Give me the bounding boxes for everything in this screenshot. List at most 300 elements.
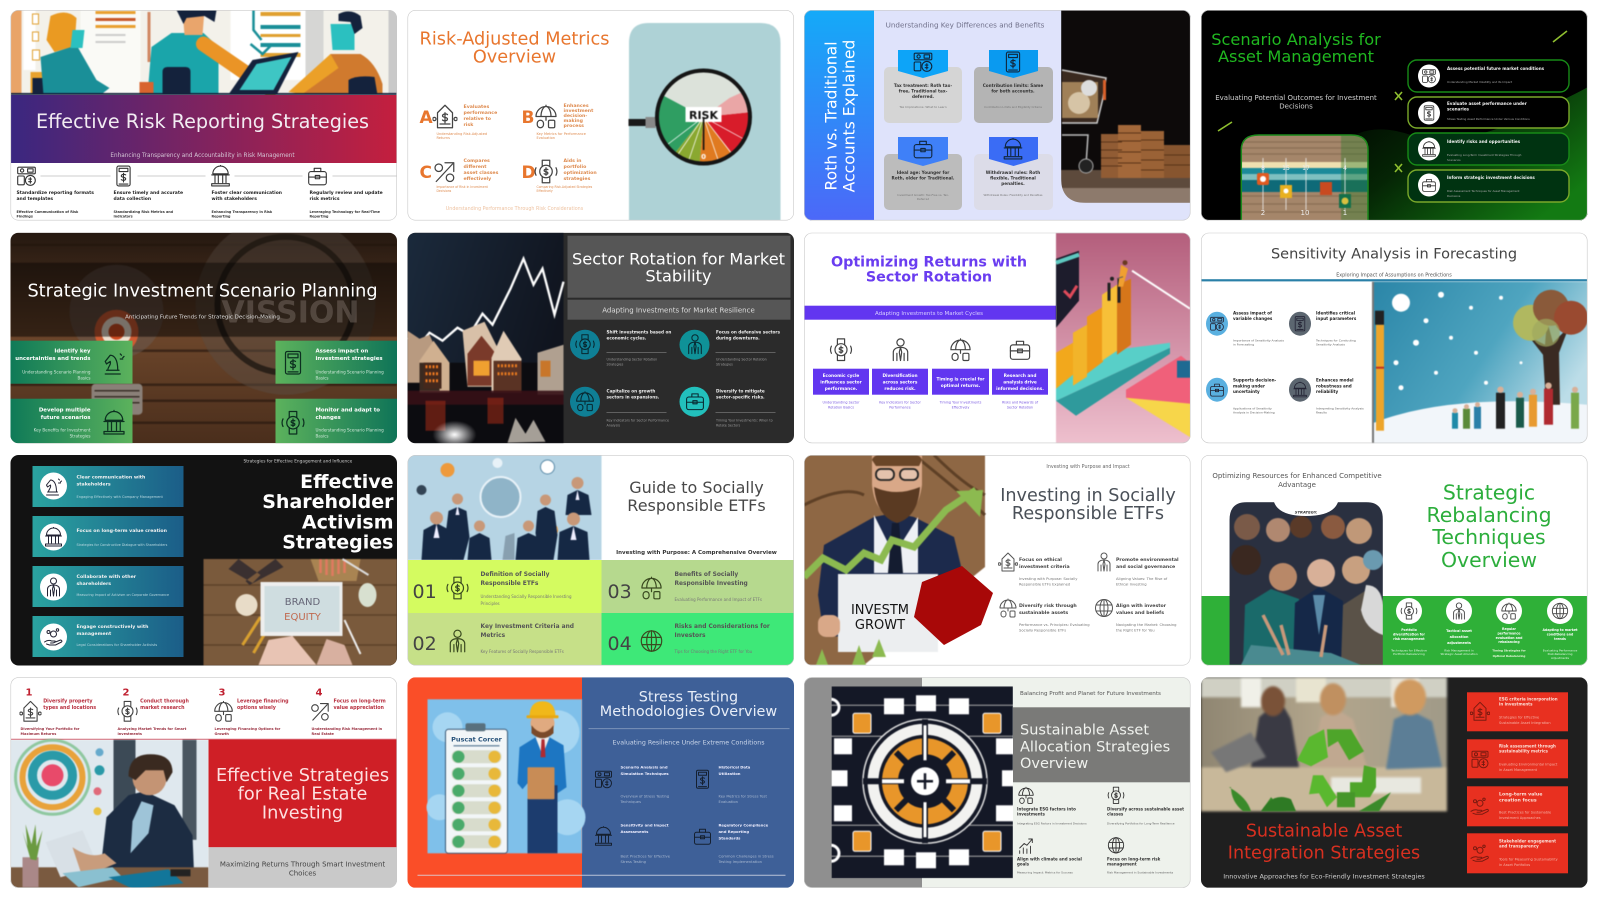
photo: recycling symbol over a blurred meeting (1201, 677, 1447, 811)
column: portfolio diversification: Portfolio (1401, 628, 1418, 632)
item: align with climate: goals (1017, 861, 1030, 866)
title: Optimizing Returns with (831, 255, 1027, 271)
item: historical data: Utilization (718, 771, 741, 776)
subtitle block (208, 847, 397, 888)
subtitle band: Adapting Investments for Market Resilience (602, 307, 755, 315)
metric A: risk (464, 122, 474, 128)
item: inform strategic decisions: Decisions (1447, 194, 1461, 198)
title: Stress Testing (639, 689, 738, 705)
card: research: Risks and Rewards of (1002, 401, 1039, 405)
item: clear communication: stakeholders (76, 482, 111, 488)
card: research: analysis drive (1003, 380, 1037, 386)
illustration: engineer with a checklist (426, 699, 586, 853)
step 2 (114, 166, 183, 219)
item: integrate ESG (1017, 787, 1087, 825)
column: regular evaluation: rebalancing (1498, 640, 1520, 644)
metric D: Aids in (564, 158, 581, 164)
item: clear communication (32, 466, 184, 507)
column: portfolio diversification: risk management (1393, 637, 1425, 641)
panel: Strategic Rebalancing Techniques Overview slide (1201, 455, 1588, 666)
metric C: effectively (464, 176, 491, 182)
title band: Sustainable Asset (1020, 722, 1149, 738)
subtitle: Evaluating Resilience Under Extreme Conditions (613, 739, 764, 746)
column: portfolio diversification (1390, 598, 1427, 656)
step 4 (309, 168, 383, 219)
card: withdrawal rules: Withdrawal Rules: Flexibility and Penalties (983, 193, 1043, 197)
strategy 2: 2 (122, 687, 130, 698)
card: diversification: Key Indicators for Sector (879, 401, 921, 405)
metric B: process (564, 123, 584, 129)
item: diversify (680, 387, 776, 428)
title: Strategic Investment Scenario Planning (27, 282, 378, 302)
card: economic cycle: Rotation Basics (828, 406, 854, 410)
item: sensitivity assessments: Sensitivity and Impact (620, 822, 669, 827)
side band with rotated title: Accounts Explained (840, 40, 858, 192)
item: enhances model robustness: Results (1316, 410, 1327, 414)
item: long-term value: Focus on long-term value creation (76, 528, 167, 534)
item: inform strategic decisions (1408, 170, 1569, 202)
photo: business team with network icons (408, 455, 602, 560)
column: regular evaluation: Timing Strategies for (1492, 648, 1526, 652)
title: Techniques (1431, 525, 1546, 549)
item: assess impact of variable changes: in Forecasting (1233, 342, 1254, 346)
header text: Understanding Key Differences and Benefits (886, 20, 1045, 30)
step 3 (212, 165, 282, 219)
title: Sustainable Asset (1246, 821, 1402, 841)
item: ESG criteria: Sustainable Asset Integration (1499, 721, 1551, 725)
card: economic cycle: Understanding Sector (823, 401, 860, 405)
column: adapting to market: trends (1554, 637, 1566, 641)
column: tactical allocation: Tactical asset (1446, 629, 1472, 633)
item: scenario analysis: Simulation Techniques (620, 771, 669, 776)
item: ESG criteria: in investments (1499, 701, 1533, 706)
metric D: portfolio (564, 164, 587, 170)
item: align with climate: Align with climate and social (1017, 856, 1083, 861)
title: Strategic (1443, 480, 1535, 504)
title: Asset Management (1218, 47, 1374, 66)
box: develop multiple future scenarios: Develop multiple (39, 408, 91, 414)
strategy 2: market research (140, 705, 185, 711)
title: Responsible ETFs (627, 496, 766, 515)
subtitle: Exploring Impact of Assumptions on Predictions (1336, 273, 1452, 279)
box: identify key uncertainties (10, 341, 132, 384)
item: collaborate: shareholders (76, 581, 111, 587)
item: risk assessment (1467, 739, 1568, 778)
item: collaborate: Collaborate with other (76, 574, 137, 580)
strategy 1: Diversifying Your Portfolio for (20, 727, 80, 731)
item: stakeholder engagement: in Asset Portfolios (1499, 863, 1530, 867)
strategy 4: 4 (316, 687, 322, 698)
block 02 (408, 613, 602, 666)
item: defensive sectors: Understanding Sector Rotation (716, 358, 767, 362)
subtitle: Anticipating Future Trends for Strategic Decision-Making (125, 315, 280, 321)
box: identify key uncertainties: Basics (78, 376, 90, 381)
card: research: informed decisions. (996, 386, 1044, 392)
strategy 2: Analyzing Market Trends for Smart (118, 727, 187, 731)
block 04: Risks and Considerations for (674, 624, 770, 630)
column: adapting to market: Post-Rebalancing (1548, 652, 1573, 656)
item: integrate ESG: Integrate ESG factors into (1017, 806, 1076, 811)
item: evaluate asset performance: scenarios (1447, 106, 1470, 112)
card: research (992, 341, 1048, 410)
subtitle band: Adapting Investments to Market Cycles (875, 311, 983, 317)
item: environmental governance: Ethical Investing (1116, 582, 1147, 586)
panel: Sustainable Asset Integration Strategies slide (1201, 677, 1588, 888)
item: long-term value: Long-term value (1499, 791, 1542, 797)
item: supports decision making: Applications of Sensitivity (1233, 407, 1272, 411)
step 4: risk metrics (310, 196, 340, 202)
panel: Optimizing Returns with Sector Rotation slide (804, 233, 1191, 443)
tablet wording: EQUITY (284, 612, 322, 623)
column: regular evaluation: evaluation and (1496, 636, 1523, 640)
column: tactical allocation (1440, 598, 1478, 656)
item: assess impact of variable changes: Assess impact of (1233, 311, 1272, 316)
photo: businessman with a laptop (10, 740, 208, 889)
item: regulatory compliance: Standards (718, 836, 741, 841)
card: ideal age (884, 137, 962, 210)
step 3: Foster clear communication (212, 190, 282, 196)
photo: team gathered around a table (1229, 502, 1383, 665)
metric B: Evaluation (536, 136, 555, 140)
box: assess impact on strategies: Assess impact on (316, 349, 368, 355)
subtitle band (568, 300, 790, 320)
strategy 3: Leverage financing (237, 698, 289, 704)
card: diversification: reduces risk. (884, 386, 916, 392)
header band with gradient (10, 95, 397, 163)
block 01: Responsible ETFs (480, 581, 539, 587)
card: tax treatment: Tax treatment: Roth tax- (894, 83, 952, 88)
subtitle: Investing with Purpose: A Comprehensive Overview (616, 550, 777, 556)
item: historical data (696, 764, 767, 804)
item: shift investments (570, 330, 671, 367)
column: regular evaluation: Regular (1502, 627, 1516, 631)
item: ethical criteria: Investing with Purpose: Socially (1019, 577, 1078, 581)
item: integrate ESG: Integrating ESG Factors in Investment Decisions (1017, 821, 1087, 825)
item: diversify: classes (1107, 811, 1124, 816)
item: long-term value: Investment Approaches (1499, 816, 1541, 820)
title: Investing in Socially (1000, 486, 1176, 506)
metric C: Importance of Risk in Investment (436, 185, 489, 189)
step 3: Enhancing Transparency in Risk (212, 210, 273, 214)
item: collaborate: Measuring Impact of Activism on Corporate Governance (76, 593, 169, 597)
item: supports decision making: uncertainty (1233, 389, 1260, 394)
illustration: isometric bars and handshake (1056, 233, 1191, 443)
item: engage constructively: Engage constructively with (76, 624, 148, 630)
column: adapting to market: Evaluating Performance (1543, 648, 1577, 652)
metric C: different (464, 164, 487, 170)
card: tax treatment: free, Traditional tax- (899, 88, 948, 94)
gauge zero: 0 (701, 153, 706, 161)
column: portfolio diversification: Techniques for Effective (1390, 648, 1427, 652)
box: monitor and adapt: changes (316, 415, 341, 421)
panel: Effective Risk Reporting Strategies slide (10, 10, 398, 220)
card: tax treatment (884, 50, 962, 123)
item: identify risks and opportunities (1408, 133, 1569, 165)
box: develop multiple future scenarios: Strategies (70, 434, 90, 439)
metric D: strategies (564, 176, 591, 182)
box: assess impact on strategies: Understanding Scenario Planning (316, 370, 384, 375)
block 01: Principles (480, 601, 500, 606)
strategy 1: Diversify property (43, 698, 93, 704)
item: align with climate: Measuring Impact: Metrics for Success (1017, 870, 1073, 874)
metric A: performance (464, 110, 497, 116)
item: diversify: sector-specific risks. (716, 395, 765, 400)
item: growth sectors: Analysis (606, 424, 620, 428)
item: environmental governance: Aligning Values: The Rise of (1116, 577, 1168, 581)
item: sensitivity assessments: Stress Testing (620, 860, 646, 864)
item: align with values: Navigating the Market: Choosing (1116, 623, 1177, 627)
block 03: 03 (608, 581, 632, 603)
tablet wording: BRAND (285, 597, 321, 608)
metric C: Decisions (436, 189, 452, 193)
metric D: D (522, 163, 536, 183)
item: diversify risk: Performance vs. Principles: Evaluating (1019, 623, 1090, 627)
panel: Risk-Adjusted Metrics Overview slide (408, 10, 794, 220)
item: stakeholder engagement: Stakeholder engagement (1499, 838, 1556, 843)
panel: Sector Rotation for Market Stability slide (408, 233, 794, 449)
item: risk assessment: Risk assessment through (1499, 743, 1556, 748)
title band (1013, 707, 1190, 782)
item: regulatory compliance: Testing Implementation (718, 860, 763, 864)
card: research: Research and (1004, 373, 1036, 379)
subtitle band (804, 306, 1056, 320)
subtitle: Innovative Approaches for Eco-Friendly Investment Strategies (1223, 872, 1425, 880)
card: tax treatment: deferred. (912, 94, 934, 99)
title: Effective Risk Reporting Strategies (36, 110, 369, 133)
metric D (522, 158, 597, 193)
item: shift investments: economic cycles. (606, 336, 647, 341)
strategy 4: Understanding Risk Management in (312, 727, 383, 731)
item: long-term value: creation focus (1499, 798, 1537, 804)
item: ethical criteria: Focus on ethical (1019, 557, 1062, 563)
background word: VISSION (221, 296, 360, 331)
item: diversify risk (1000, 599, 1090, 632)
item: historical data: Evaluation (718, 800, 739, 804)
item: engage constructively: management (76, 631, 112, 637)
panel: Sensitivity Analysis in Forecasting slide (1201, 233, 1588, 444)
block 02: Metrics (480, 633, 506, 639)
panel: Effective Shareholder Activism Strategies slide (10, 455, 398, 666)
caption: Balancing Profit and Planet for Future Investments (1020, 691, 1161, 697)
item: defensive sectors: Strategies (716, 363, 733, 367)
item: clear communication: Engaging Effectively with Company Management (76, 495, 163, 499)
panel: Effective Strategies for Real Estate Investing slide (10, 677, 397, 889)
item: regulatory compliance: Common Challenges in Stress (718, 854, 774, 858)
photo: businessman holding investment growth sign (804, 452, 985, 665)
card: economic cycle: performance. (825, 386, 858, 392)
axis numbers: 4 (1343, 165, 1347, 172)
item: ethical criteria: investment criteria (1019, 564, 1070, 570)
item: inform strategic decisions: Inform strategic investment decisions (1447, 175, 1535, 180)
image: scenario timeline (1241, 135, 1368, 221)
red title block: Effective Strategies (216, 766, 389, 786)
step 3: Reporting (212, 215, 231, 219)
card: contribution limits: Contribution Limits and Eligibility Criteria (984, 105, 1042, 109)
sign wording: GROWT (855, 618, 905, 633)
column: regular evaluation: performance (1498, 631, 1520, 635)
column: tactical allocation: Strategic Asset Allocation (1440, 652, 1478, 656)
block 03: Benefits of Socially (674, 572, 738, 578)
box: develop multiple future scenarios: future scenarios (41, 415, 90, 421)
subtitle: Decisions (1279, 102, 1313, 110)
item: historical data: Historical Data (718, 764, 751, 769)
block 01: Understanding Socially Responsible Investing (480, 594, 572, 599)
title: Guide to Socially (629, 478, 764, 497)
item: diversify risk: sustainable assets (1019, 610, 1068, 616)
strategy 1: Maximum Returns (20, 732, 56, 736)
column: tactical allocation: Risk Management in (1444, 648, 1474, 652)
box: monitor and adapt: Basics (316, 434, 328, 439)
metric B (522, 103, 594, 140)
item: identifies critical parameters (1289, 311, 1357, 346)
block 01 (408, 560, 602, 613)
item: assess impact of variable changes: Importance of Sensitivity Analysis (1233, 339, 1284, 343)
column: tactical allocation: adjustments (1447, 641, 1471, 645)
step 2: Standardizing Risk Metrics and (114, 210, 174, 214)
block 02: Key Investment Criteria and (480, 624, 574, 630)
item: assess market conditions: Assess potential future market conditions (1447, 66, 1545, 71)
step 2: Ensure timely and accurate (114, 190, 183, 196)
metric B: Enhances (564, 103, 589, 109)
panel: Stress Testing Methodologies Overview slide (408, 677, 794, 888)
item: diversify (1107, 787, 1184, 825)
block 01: 01 (412, 581, 437, 603)
block 01: Definition of Socially (480, 572, 550, 578)
item: ESG criteria: Strategies for Effective (1499, 715, 1539, 719)
item: diversify: Diversify to mitigate (716, 389, 765, 394)
card: economic cycle (813, 339, 869, 410)
strategy 2: Investments (118, 732, 142, 736)
item: identifies critical parameters: input parameters (1316, 316, 1357, 321)
block 04: Investors (674, 633, 706, 639)
item: ESG criteria (1467, 692, 1568, 731)
item: risk assessment: in Asset Management (1499, 768, 1538, 772)
title: Risk-Adjusted Metrics (420, 30, 609, 50)
metric A: relative to (464, 116, 492, 122)
item: align with values: values and beliefs (1116, 610, 1164, 616)
step 1: Effective Communication of Risk (16, 210, 79, 214)
strategy 3 (214, 687, 289, 736)
card: contribution limits: Contribution limits: Same (983, 83, 1043, 88)
title: Strategies (282, 532, 394, 554)
step 1: Findings (16, 215, 33, 219)
axis numbers: 8 (1261, 165, 1265, 172)
item: assess market conditions (1408, 60, 1569, 92)
image: scenario timeline: 1 (1343, 209, 1347, 217)
item: supports decision making: Supports decision- (1233, 378, 1276, 383)
item: scenario analysis: Overview of Stress Testing (620, 794, 669, 798)
item: long-term risk (1107, 838, 1174, 874)
box: develop multiple future scenarios (10, 399, 132, 443)
decorative red hexagon (914, 566, 993, 645)
metric C: asset classes (464, 170, 499, 176)
strategy 2: Conduct thorough (140, 698, 189, 704)
block 03: Evaluating Performance and Impact of ETFs (674, 597, 762, 602)
subtitle block: Maximizing Returns Through Smart Investment (220, 860, 385, 868)
item: long-term value (1467, 786, 1568, 826)
column: adapting to market: Adapting to market (1542, 628, 1578, 632)
item: growth sectors: Capitalize on growth (606, 389, 655, 394)
item: diversify risk: Socially Responsible ETFs (1019, 628, 1066, 632)
strategy 3: Leveraging Financing Options for (214, 727, 281, 731)
card: contribution limits (974, 50, 1053, 123)
card: timing: Timing Your Investments (939, 401, 982, 405)
metric A: Understanding Risk-Adjusted (436, 132, 487, 136)
photo: light bulb, target and vision text on wood (10, 215, 397, 423)
block 02: Key Features of Socially Responsible ETFs (480, 649, 564, 654)
item: historical data: Key Metrics for Stress Test (718, 794, 767, 798)
strategy 3: Growth (214, 732, 229, 736)
item: sensitivity assessments (596, 822, 671, 864)
red title block: for Real Estate (238, 784, 367, 804)
title: Responsible ETFs (1012, 504, 1164, 524)
item: collaborate (32, 566, 184, 607)
item: long-term value: Best Practices for Sustainable (1499, 810, 1551, 814)
item: long-term value (32, 516, 184, 557)
step 2: data collection (114, 196, 151, 202)
card: ideal age: Investment Growth: Tax-Free vs. Tax- (897, 193, 949, 197)
card: withdrawal rules (974, 137, 1053, 210)
block 02: 02 (412, 633, 437, 655)
step 4: Regularly review and update (310, 190, 383, 196)
card: diversification: Performance (889, 406, 911, 410)
item: evaluate asset performance: Stress Testing Asset Performance Under Various Conditions (1447, 117, 1530, 121)
block 03 (602, 560, 794, 613)
step 1 (16, 167, 94, 219)
accent marks (1218, 31, 1567, 172)
item: evaluate asset performance: Evaluate asset performance under (1447, 101, 1527, 106)
panel: Investing in Socially Responsible ETFs slide (804, 452, 1190, 666)
card: withdrawal rules: penalties. (1001, 181, 1025, 186)
item: regulatory compliance (694, 822, 774, 864)
title: Overview (473, 48, 556, 68)
box: monitor and adapt: Understanding Scenario Planning (316, 428, 384, 433)
item: risk assessment: Evaluating Environmental Impact (1499, 762, 1558, 766)
axis numbers: 15 (1282, 165, 1290, 172)
item: scenario analysis: Techniques (620, 800, 641, 804)
item: stakeholder engagement: Tools for Measuring Sustainability (1498, 857, 1558, 861)
footer text: Understanding Performance Through Risk Considerations (446, 206, 584, 212)
item: engage constructively (32, 616, 184, 657)
item: ethical criteria: Responsible ETFs Explained (1019, 582, 1070, 586)
item: clear communication: Clear communication with (76, 474, 145, 480)
block 04: 04 (608, 633, 632, 655)
clipboard heading: Puscat Corcer (451, 735, 503, 743)
image: scenario timeline: 10 (1301, 209, 1309, 217)
item: diversify risk: Diversify risk through (1019, 603, 1077, 609)
item: diversify: Diversify across sustainable asset (1107, 806, 1184, 811)
item: supports decision making: making under (1233, 383, 1265, 388)
box: identify key uncertainties: Understanding Scenario Planning (22, 370, 91, 375)
strategy 3: 3 (218, 687, 226, 698)
caption: Investing with Purpose and Impact (1046, 464, 1130, 470)
item: integrate ESG: investments (1017, 811, 1045, 816)
item: stakeholder engagement (1467, 833, 1568, 873)
item: long-term risk: Risk Management in Sustainable Investments (1107, 870, 1174, 874)
strategy 2 (118, 687, 189, 736)
column: adapting to market (1542, 598, 1578, 660)
title band: Allocation Strategies (1020, 739, 1170, 755)
photo: coins and shopping cart (1061, 10, 1191, 203)
item: growth sectors (570, 387, 669, 428)
card: ideal age: Roth, older for Traditional. (892, 176, 955, 180)
item: environmental governance: and social governance (1116, 564, 1175, 570)
item: long-term risk: management (1107, 861, 1137, 866)
heading block: Stability (645, 267, 712, 286)
title: Scenario Analysis for (1211, 30, 1381, 49)
box: monitor and adapt (276, 399, 397, 443)
item: defensive sectors: during downturns. (716, 336, 760, 341)
